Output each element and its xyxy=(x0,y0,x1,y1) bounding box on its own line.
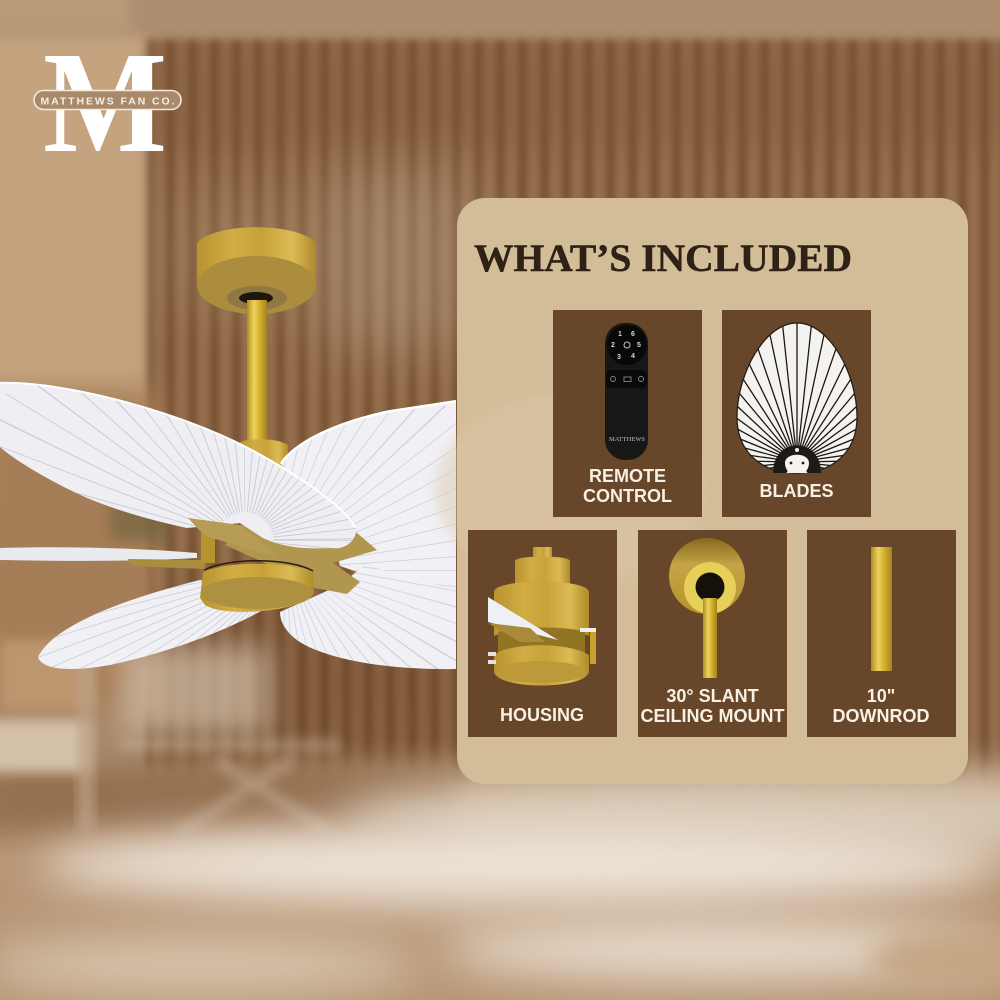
icon: blade xyxy=(736,322,858,474)
label: remote control: REMOTE xyxy=(589,466,666,486)
logo: Matthews Fan Co.: M xyxy=(43,23,167,183)
fan blade: far left edge-on xyxy=(0,547,197,561)
label: downrod: 10" xyxy=(867,686,895,706)
card: remote control xyxy=(553,310,702,517)
panel: what's included xyxy=(435,198,968,784)
label: housing: HOUSING xyxy=(500,705,584,725)
fan part: collar xyxy=(240,439,288,480)
label: slant ceiling mount xyxy=(640,686,784,726)
fan part: ceiling canopy xyxy=(197,227,316,314)
card: downrod xyxy=(807,530,956,737)
icon: remote: 3 xyxy=(617,354,621,361)
label: slant ceiling mount: 30° SLANT xyxy=(666,686,759,706)
icon: housing xyxy=(488,547,596,686)
fan part: blade arms xyxy=(128,525,377,594)
logo: Matthews Fan Co.: MATTHEWS FAN CO. xyxy=(40,96,175,108)
fan blade: lower right xyxy=(280,566,456,670)
icon: remote: 4 xyxy=(631,353,635,360)
label: slant ceiling mount: CEILING MOUNT xyxy=(640,706,784,726)
icon: downrod xyxy=(871,547,892,671)
icon: slant mount xyxy=(669,538,745,678)
fan part: motor housing xyxy=(200,561,314,612)
icon: remote: 1 xyxy=(618,331,622,338)
card: 30 degree slant ceiling mount xyxy=(638,530,787,737)
icon: remote: 5 xyxy=(637,342,641,349)
label: remote control: CONTROL xyxy=(583,486,672,506)
fan part: downrod xyxy=(247,300,267,445)
card: housing xyxy=(468,530,617,737)
fan part: front arm plate xyxy=(188,518,277,557)
fan blade: upper left xyxy=(0,382,356,548)
icon: remote: 6 xyxy=(631,331,635,338)
fan blade: lower left xyxy=(38,580,261,669)
icon: remote xyxy=(605,323,648,460)
label: blades: BLADES xyxy=(759,481,834,501)
icon: remote: MATTHEWS xyxy=(609,436,645,443)
icon: remote: 2 xyxy=(611,342,615,349)
label: downrod xyxy=(832,686,930,726)
card: blades xyxy=(722,310,871,517)
label: downrod: DOWNROD xyxy=(832,706,930,726)
fan blade: far right upper xyxy=(280,400,456,590)
fan: ceiling fan with palm blades xyxy=(0,227,460,705)
label: remote control xyxy=(583,466,672,506)
heading: WHAT’S INCLUDED xyxy=(474,237,852,280)
